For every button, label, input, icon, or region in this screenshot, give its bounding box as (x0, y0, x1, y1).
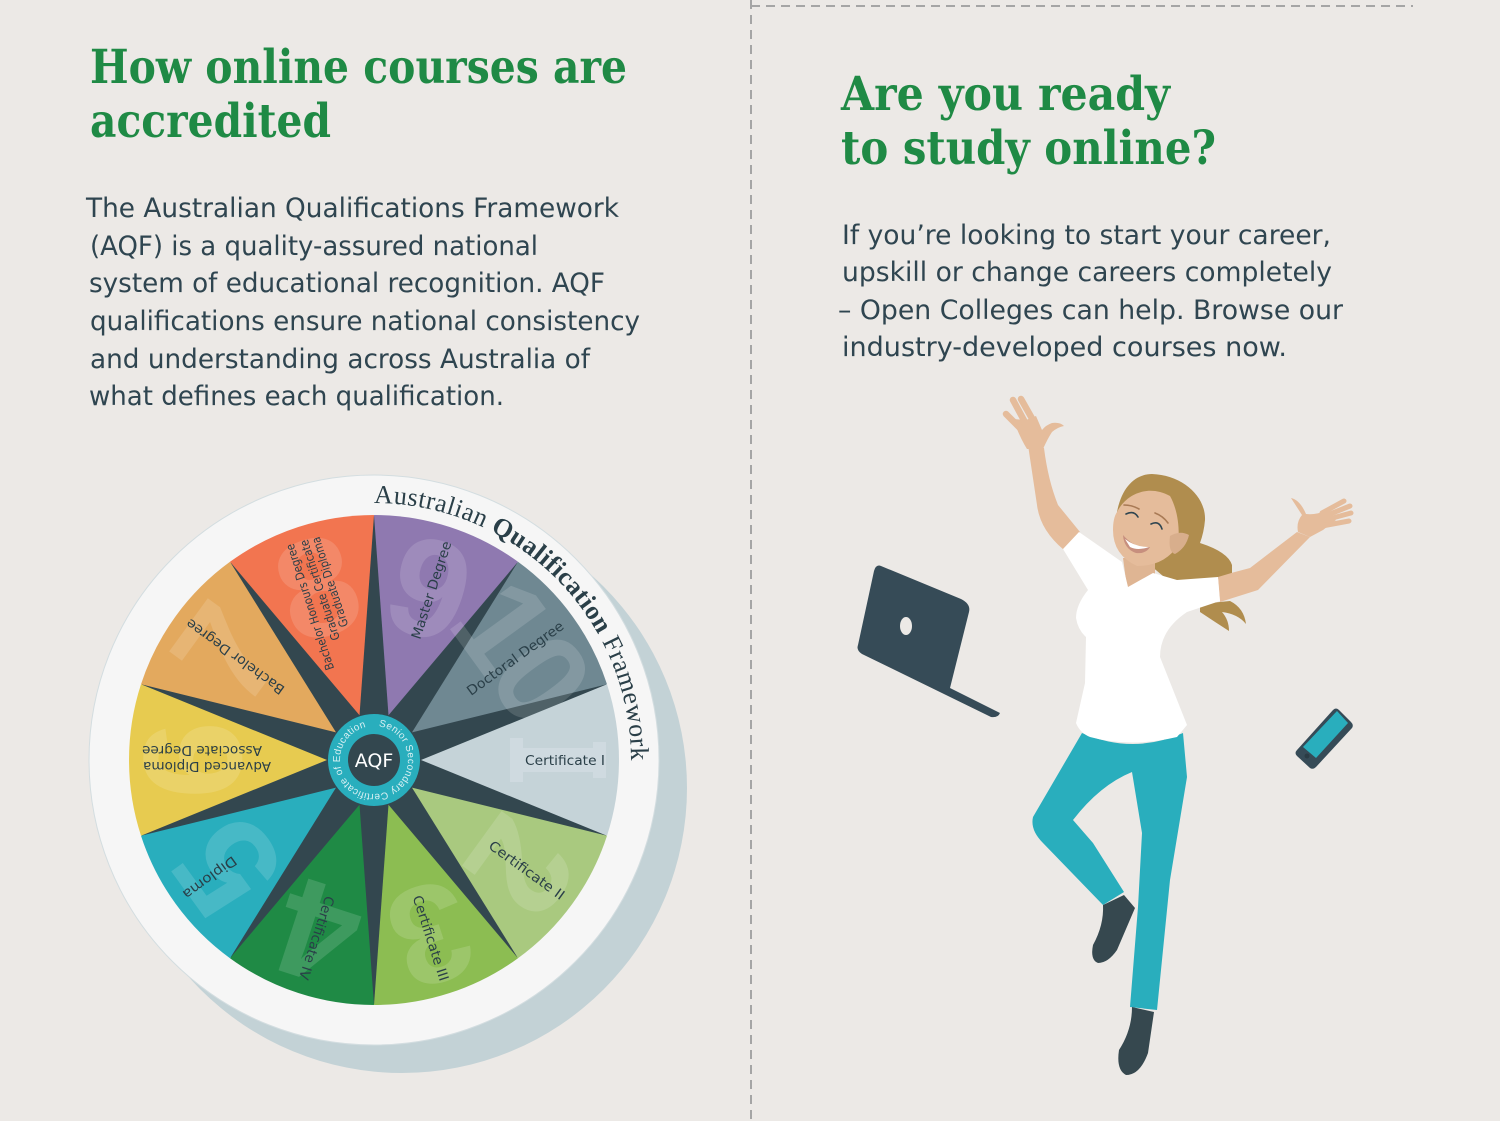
icon: falling phone (1296, 708, 1353, 769)
text block: AQF description: The Australian Qualifications Framework (85, 193, 620, 224)
left arm and hand (1006, 399, 1080, 550)
ear (1170, 533, 1189, 554)
wedge: level 9 master degree: Master Degree (409, 539, 455, 641)
eyes and brows (1124, 505, 1168, 529)
text block: AQF description: system of educational recognition. AQF (89, 268, 605, 299)
wedge: level 6 advanced diploma (114, 684, 327, 836)
hair (1117, 474, 1232, 582)
text block: open colleges invitation: – Open Colleges can help. Browse our (838, 295, 1343, 326)
chart: AQF qualification wheel (88, 474, 687, 1073)
right arm and hand (1218, 498, 1351, 602)
wedge: level 5 diploma: 5 (141, 789, 314, 945)
text block: open colleges invitation (838, 220, 1343, 363)
illustration: jumping woman (1006, 399, 1351, 1075)
text block: open colleges invitation: industry-developed courses now. (842, 332, 1287, 363)
wedge: level 10 doctoral degree: 10 (423, 553, 619, 747)
icon: falling laptop (858, 566, 1000, 717)
curved title: Australian Qualification Framework: Australian Qualification Framework (374, 486, 649, 760)
wedge: level 8 bachelor honours degree: Graduate Certificate (297, 538, 343, 642)
wedge: level 7 bachelor degree: 7 (141, 575, 314, 731)
wedge: level 8 bachelor honours degree: Graduate Diploma (309, 535, 351, 629)
hub: AQF centre: AQF (355, 750, 393, 772)
heading: are you ready to study online: to study online? (841, 121, 1216, 176)
wedge: level 4 certificate IV: Certificate IV (295, 894, 337, 982)
wedge: level 8 bachelor honours degree: 8 (256, 501, 379, 674)
wedge: level 6 advanced diploma: Advanced Diploma (143, 758, 271, 774)
text block: AQF description: what defines each qualification. (89, 381, 504, 412)
text block: AQF description: (AQF) is a quality-assured national (90, 231, 538, 262)
heading: how online courses are accredited: How online courses are (90, 40, 627, 95)
wedge: level 3 certificate III: 3 (369, 848, 492, 1021)
text block: AQF description: qualifications ensure national consistency (90, 306, 640, 337)
face (1113, 491, 1179, 566)
heading: how online courses are accredited (90, 40, 627, 149)
wedge: level 5 diploma: Diploma (179, 852, 240, 902)
wedge: level 8 bachelor honours degree: Bachelor Honours Degree (283, 542, 337, 672)
text block: open colleges invitation: upskill or change careers completely (842, 257, 1332, 288)
smile (1123, 535, 1150, 553)
wheel shadow (117, 503, 687, 1073)
wedge: level 6 advanced diploma: 6 (114, 721, 271, 799)
wedge: level 3 certificate III: Certificate III (409, 894, 451, 983)
wedge: level 1 certificate I: Certificate I (525, 753, 605, 769)
wedge: level 3 certificate III (369, 805, 518, 1021)
text block: AQF description (85, 193, 640, 412)
heading: how online courses are accredited: accredited (90, 94, 331, 149)
wheel dark star base (130, 516, 618, 1004)
wedge: level 9 master degree: 9 (368, 502, 491, 675)
heading: are you ready to study online (840, 67, 1216, 176)
wheel white rim (89, 475, 659, 1045)
text block: open colleges invitation: If you’re looking to start your career, (842, 220, 1331, 251)
wedge: level 9 master degree (368, 502, 518, 715)
shoe left (1092, 895, 1135, 963)
pants (1032, 733, 1187, 1010)
wedge: level 4 certificate IV: 4 (256, 846, 379, 1019)
neck (1123, 558, 1155, 588)
shoe right (1118, 1007, 1154, 1075)
heading: are you ready to study online: Are you ready (840, 67, 1172, 122)
shirt (1063, 532, 1220, 742)
wedge: level 10 doctoral degree: Doctoral Degree (464, 618, 567, 699)
wedge: level 8 bachelor honours degree (230, 501, 379, 715)
text block: AQF description: and understanding across Australia of (90, 344, 591, 375)
wedge: level 2 certificate II: 2 (434, 789, 607, 945)
ponytail (1200, 601, 1246, 631)
wedge: level 4 certificate IV (230, 805, 379, 1019)
wedge: level 2 certificate II: Certificate II (485, 838, 568, 904)
wedge: level 6 advanced diploma: Associate Degree (142, 742, 262, 758)
hub: AQF centre: Senior Secondary Certificate of Education (333, 720, 414, 800)
wedge: level 7 bachelor degree: Bachelor Degree (183, 615, 288, 697)
wedge: level 1 certificate I (421, 684, 619, 836)
